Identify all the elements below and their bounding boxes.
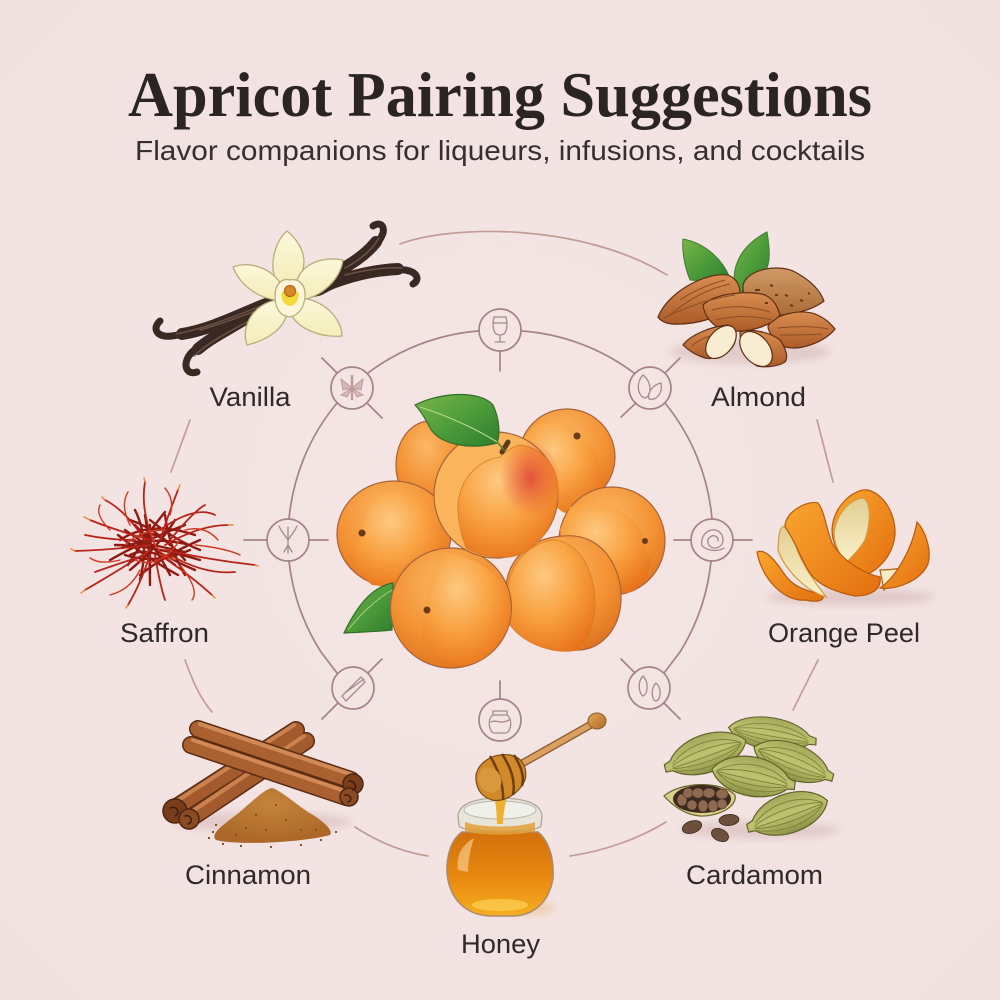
peel ring bbox=[757, 490, 929, 601]
pod centre bbox=[708, 749, 799, 805]
illustration: central apricots bbox=[337, 394, 665, 668]
pod top bbox=[726, 711, 819, 758]
illustration: saffron threads bbox=[71, 478, 258, 608]
open pod with seeds bbox=[664, 785, 735, 816]
icon: star anise bbox=[331, 367, 373, 409]
icon: orange peel spiral bbox=[691, 519, 733, 561]
loose seeds bbox=[681, 814, 739, 844]
almond leaves bbox=[683, 232, 769, 295]
title: Apricot Pairing Suggestions bbox=[128, 60, 872, 130]
apricot back right bbox=[519, 409, 615, 513]
leaf top bbox=[415, 394, 505, 451]
illustration: almond bbox=[658, 232, 835, 373]
pod lower right bbox=[741, 781, 834, 847]
label: Orange Peel: Orange Peel bbox=[768, 618, 920, 648]
label: Vanilla: Vanilla bbox=[210, 382, 291, 412]
outer connector arcs bbox=[171, 231, 833, 856]
cinnamon stick pair two bbox=[191, 724, 363, 806]
illustration: vanilla bbox=[156, 224, 417, 373]
pod left bbox=[658, 721, 752, 786]
illustration: cardamom bbox=[658, 711, 840, 847]
icon: almonds bbox=[629, 367, 671, 409]
honey drip bbox=[494, 797, 507, 824]
almond kernels bbox=[658, 268, 835, 373]
cinnamon stick pair one bbox=[163, 725, 306, 829]
vanilla bean one bbox=[156, 268, 417, 336]
illustration: honey jar and dipper bbox=[447, 713, 606, 916]
illustration: cinnamon bbox=[163, 724, 363, 847]
icon: honey jar bbox=[479, 699, 521, 741]
illustration: orange peel bbox=[757, 490, 935, 605]
honey jar rim bbox=[458, 798, 542, 835]
apricot back left bbox=[396, 421, 464, 509]
apricot bottom left bbox=[390, 548, 512, 668]
vanilla flower bbox=[233, 231, 343, 345]
apricot centre with blush bbox=[434, 432, 560, 558]
cinnamon powder bbox=[214, 788, 331, 843]
icon: cardamom seeds bbox=[628, 667, 670, 709]
apricot bottom right bbox=[506, 536, 621, 651]
dipper head bbox=[475, 754, 526, 800]
label: Cardamom: Cardamom bbox=[686, 860, 823, 890]
label: Cinnamon: Cinnamon bbox=[185, 860, 311, 890]
inner ring connector arcs bbox=[244, 331, 752, 719]
icon: cinnamon stick bbox=[332, 667, 374, 709]
apricot right bbox=[559, 487, 665, 595]
dipper knob bbox=[588, 713, 606, 729]
icon: wine glass bbox=[479, 309, 521, 351]
subtitle: Flavor companions for liqueurs, infusions, and cocktails bbox=[135, 135, 865, 166]
label: Almond: Almond bbox=[711, 382, 806, 412]
apricot left bbox=[337, 481, 451, 587]
dipper handle bbox=[523, 724, 592, 763]
pod right bbox=[748, 730, 840, 794]
label: Saffron: Saffron bbox=[120, 618, 209, 648]
honey jar body bbox=[447, 832, 553, 916]
vanilla bean two bbox=[186, 224, 383, 373]
icon: saffron sprig bbox=[267, 519, 309, 561]
label: Honey: Honey bbox=[461, 929, 541, 959]
leaf lower left bbox=[344, 583, 393, 633]
